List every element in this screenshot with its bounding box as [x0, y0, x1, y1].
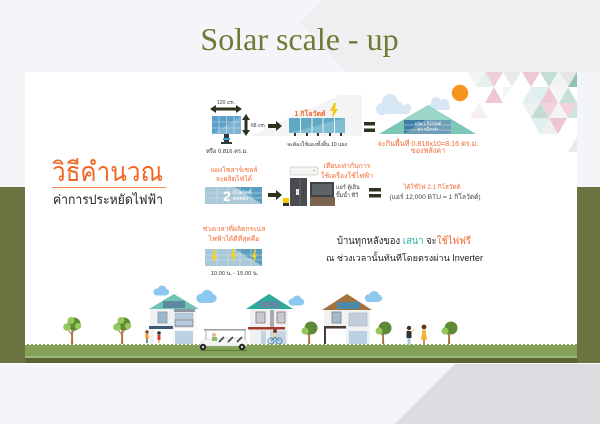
solar panel 2 kW	[205, 187, 262, 204]
row 2: production: ปั๊มน้ำ ทีวี	[336, 191, 358, 199]
row 2: production	[205, 162, 481, 206]
ground strip	[25, 344, 577, 363]
width arrow	[210, 105, 242, 113]
solar panel 2 kW: 2	[223, 188, 231, 204]
row 1: panel size: ของหลังคา	[411, 146, 445, 155]
golf cart	[200, 329, 247, 351]
row 3: peak hours	[203, 224, 266, 277]
message: บ้านทุกหลังของ เสนา จะใช้ไฟฟรี	[337, 235, 472, 247]
icon: sun	[452, 85, 468, 101]
children	[145, 330, 161, 343]
equals sign	[369, 188, 381, 198]
heading: calculation method	[52, 157, 166, 207]
heading: calculation method: วิธีคำนวณ	[52, 157, 163, 187]
decorative triangle pattern	[467, 72, 577, 152]
icon: television	[310, 182, 335, 206]
arrow	[268, 190, 282, 200]
icon: solar panel on stand	[212, 116, 241, 144]
appliance list: แอร์ ตู้เย็น	[336, 183, 360, 191]
icon: fridge	[290, 178, 307, 206]
cyclist	[268, 329, 282, 344]
house 3	[322, 294, 372, 344]
panels array	[289, 118, 345, 136]
house 1	[149, 294, 199, 344]
house 2	[246, 294, 293, 344]
1 kW label: 1 กิโลวัตต์	[294, 109, 326, 118]
row 2: production: ใช้เครื่องใช้ไฟฟ้า	[321, 171, 373, 180]
clouds	[376, 94, 450, 115]
icon: air conditioner	[290, 167, 318, 175]
message: ณ ช่วงเวลานั้นทันทีโดยตรงผ่าน Inverter	[326, 251, 483, 263]
roof with solar panel: ต่อ หนึ่งหลัง	[418, 126, 438, 132]
solar panel 2 kW: กิโลวัตต์	[233, 189, 251, 196]
heading: calculation method: ค่าการประหยัดไฟฟ้า	[53, 192, 163, 207]
title: Solar scale - up	[200, 21, 399, 57]
solar panel with lightning	[205, 249, 262, 266]
row 2: production: (แอร์ 12,000 BTU = 1 กิโลวัตต์)	[389, 193, 481, 201]
solar panel 2 kW: ต่อหลัง	[233, 196, 249, 202]
row 2: production: จะผลิตไฟได้	[216, 175, 252, 183]
time caption: 10.00 น. - 15.00 น.	[211, 271, 259, 277]
row 1: panel size: 68 cm.	[251, 123, 266, 129]
row 3: peak hours: ไฟฟ้าได้ดีที่สุดคือ	[208, 234, 259, 243]
grey beam	[250, 95, 362, 136]
result text: ได้ใช้ไฟ 2.1 กิโลวัตต์	[402, 183, 461, 191]
production heading: แผงโซลาร์เซลล์	[211, 165, 257, 174]
panel dimensions text: 120 cm.	[217, 100, 235, 106]
roof with solar panel	[379, 105, 476, 134]
message	[326, 235, 483, 263]
trees	[63, 317, 457, 344]
roof area text: จะกินพื้นที่ 0.816x10=8.16 ตร.ม.	[378, 138, 478, 148]
couple	[406, 325, 427, 345]
icon: lightning	[330, 103, 338, 118]
comparison heading: เทียบเท่ากับการ	[323, 162, 371, 170]
icon: yellow appliance	[283, 198, 289, 203]
area caption: หรือ 0.816 ตร.ม.	[206, 147, 248, 155]
equals sign	[364, 122, 375, 132]
row 1: panel size	[206, 85, 478, 155]
arrow	[268, 121, 282, 131]
white main panel	[25, 72, 577, 357]
sky clouds	[154, 286, 382, 306]
panels caption: จะต้องใช้แผงทั้งสิ้น 10 แผง	[287, 140, 347, 148]
roof with solar panel: ผลิต 1 กิโลวัตต์	[415, 121, 442, 126]
peak heading: ช่วงเวลาที่ผลิตกระแส	[203, 224, 266, 233]
height arrow	[242, 114, 250, 136]
